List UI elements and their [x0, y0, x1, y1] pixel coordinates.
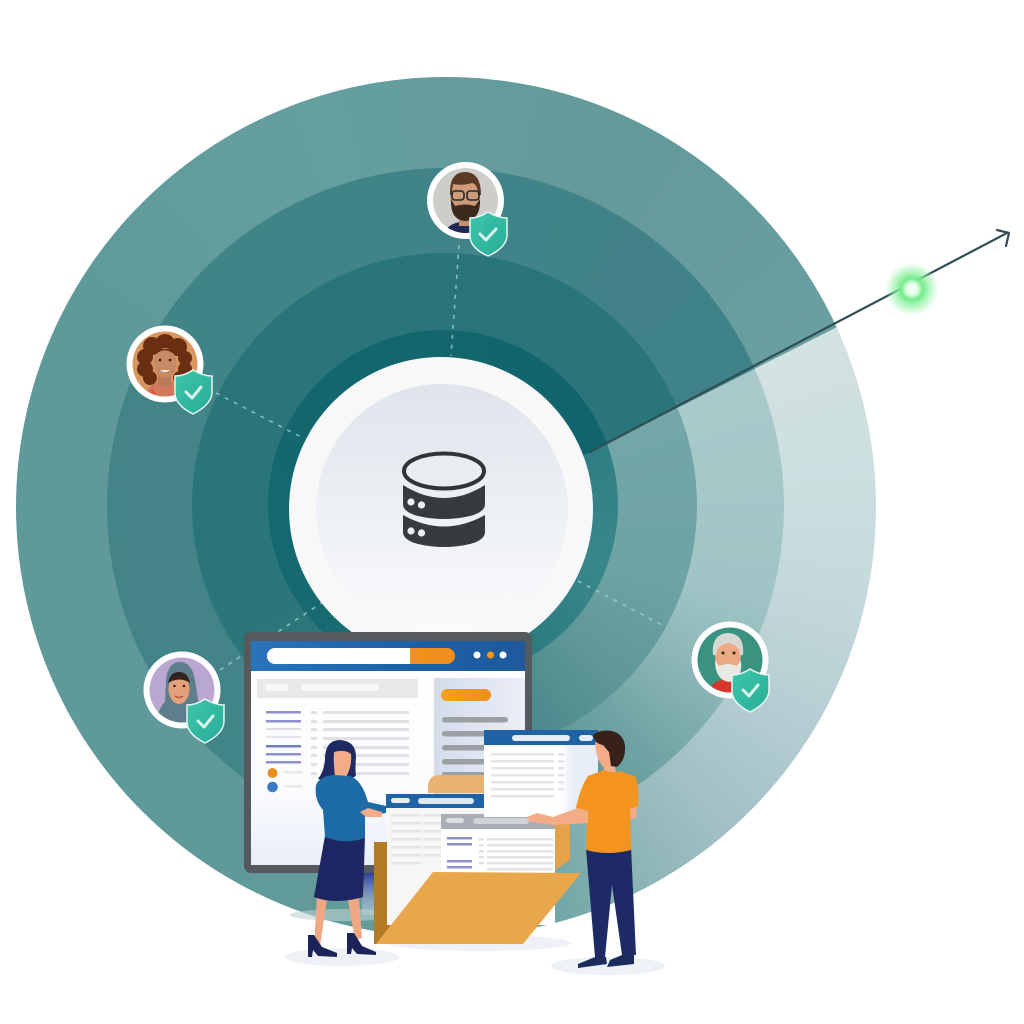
growth arrow — [590, 230, 1009, 452]
content header — [257, 679, 418, 698]
hand — [360, 808, 382, 817]
central hub circle — [289, 357, 593, 661]
floor shadows — [285, 935, 665, 975]
hair — [593, 730, 625, 767]
far arm — [628, 806, 637, 819]
woman figure — [308, 740, 386, 957]
glowing green node — [885, 262, 939, 316]
trousers — [586, 847, 636, 957]
folder back — [374, 775, 570, 944]
shoes — [578, 957, 607, 968]
document: blue header — [386, 794, 555, 925]
icon: shield check, man — [470, 212, 507, 256]
document: grey header — [441, 814, 555, 925]
hair — [318, 740, 356, 784]
icon: shield check, curly hair woman — [175, 370, 212, 414]
avatar: woman with curly hair — [126, 326, 204, 402]
icon: database — [403, 454, 485, 547]
forearm and hand — [527, 808, 588, 825]
shoes — [308, 935, 337, 957]
folder front flap — [376, 872, 581, 944]
table rows — [311, 711, 409, 775]
left list lines — [266, 711, 301, 764]
monitor stand — [290, 873, 400, 921]
ring: outer — [16, 77, 876, 937]
ring: inner — [268, 330, 618, 680]
monitor — [244, 632, 532, 873]
icon: shield check, older man — [732, 669, 769, 712]
icon: shield check, hijab woman — [187, 699, 224, 743]
face — [334, 751, 351, 782]
avatar: woman in hijab — [144, 652, 220, 728]
avatar: older man with white beard — [692, 622, 768, 698]
legs — [314, 896, 327, 946]
blue top — [316, 775, 386, 841]
document: top right — [484, 730, 598, 817]
orange shirt — [576, 770, 638, 853]
man figure — [527, 730, 638, 968]
ring: third — [192, 253, 697, 758]
skirt — [314, 836, 365, 901]
status dots — [267, 768, 302, 792]
sidebar — [434, 678, 525, 865]
neck and face — [595, 742, 616, 776]
browser header bar — [251, 641, 525, 671]
dashed connector lines — [216, 245, 666, 670]
ring: second — [107, 168, 784, 845]
avatar: man with glasses — [427, 162, 504, 239]
